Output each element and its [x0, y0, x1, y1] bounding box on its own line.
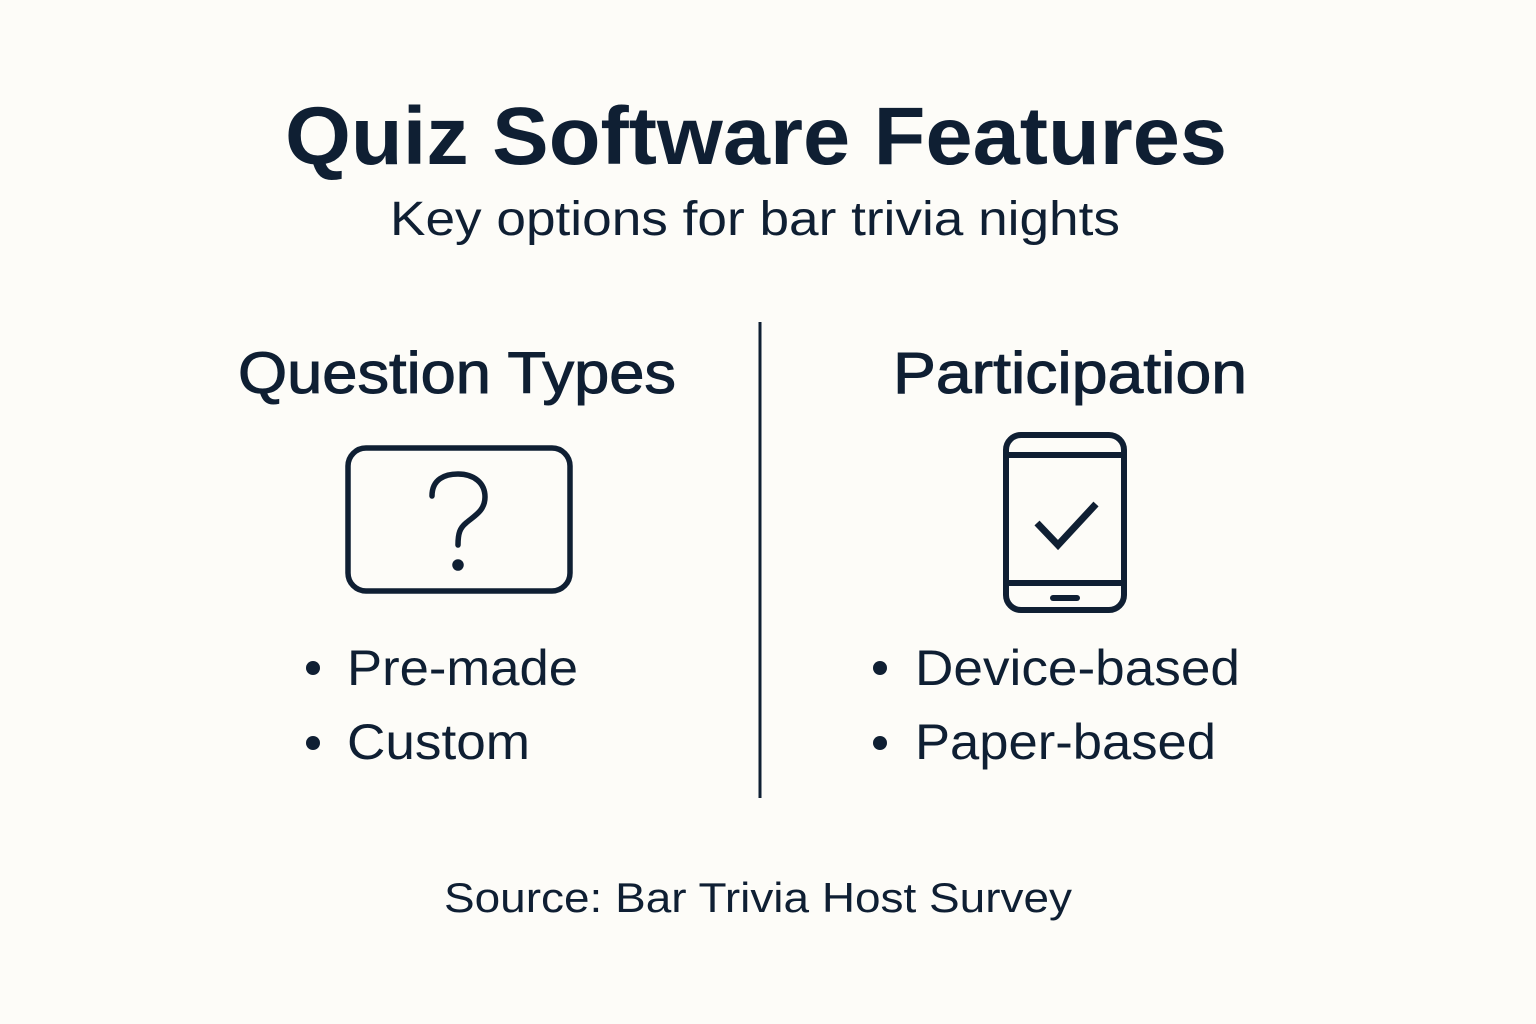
- title: Quiz Software Features: [285, 91, 1227, 182]
- bullet list: question types: Custom: [347, 714, 530, 770]
- panel: question types: [238, 341, 676, 770]
- heading: question types: Question Types: [238, 341, 676, 406]
- bullet list: participation: Device-based: [915, 640, 1240, 696]
- bullet list: participation: Paper-based: [915, 714, 1216, 770]
- bullet list: participation: [873, 640, 1240, 770]
- bullet list: question types: [306, 640, 578, 770]
- icon: phone with check: [1006, 435, 1124, 610]
- source note: Source: Bar Trivia Host Survey: [444, 874, 1072, 921]
- icon: question mark box: [348, 448, 570, 591]
- panel: participation: [873, 341, 1247, 770]
- heading: participation: Participation: [893, 341, 1247, 406]
- bullet list: question types: Pre-made: [347, 640, 578, 696]
- subtitle: Key options for bar trivia nights: [390, 193, 1120, 246]
